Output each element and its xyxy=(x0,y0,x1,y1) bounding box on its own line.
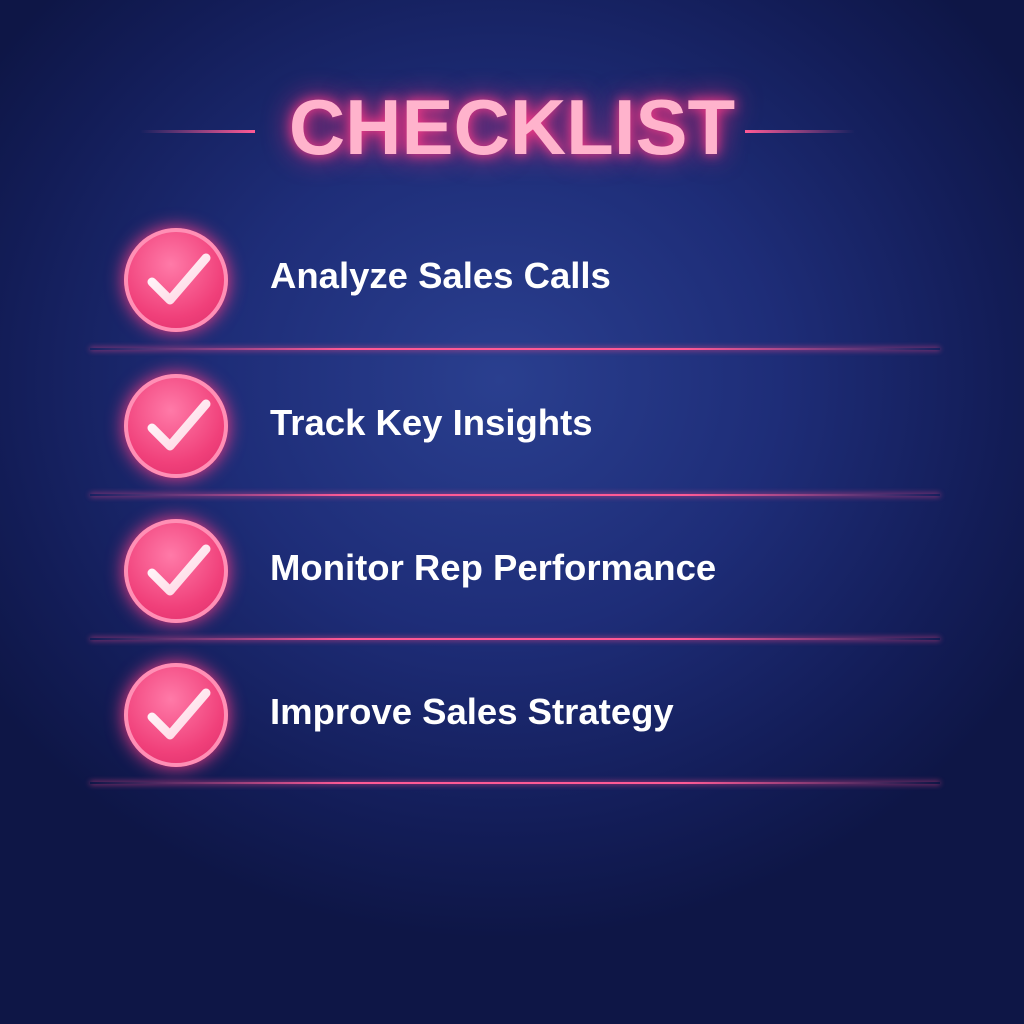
item 2: Track Key Insights xyxy=(270,402,593,443)
item 3: Monitor Rep Performance xyxy=(270,547,716,588)
item 1: Analyze Sales Calls xyxy=(270,255,611,296)
title: CHECKLIST xyxy=(289,83,735,171)
icon: check 3 xyxy=(124,519,228,623)
icon: check 1 xyxy=(124,228,228,332)
item 2 xyxy=(110,360,593,492)
icon: check 4 xyxy=(124,663,228,767)
item 4: Improve Sales Strategy xyxy=(270,691,674,732)
item 3 xyxy=(110,504,716,636)
item 4 xyxy=(110,648,674,781)
item 1 xyxy=(110,214,611,346)
icon: check 2 xyxy=(124,374,228,478)
